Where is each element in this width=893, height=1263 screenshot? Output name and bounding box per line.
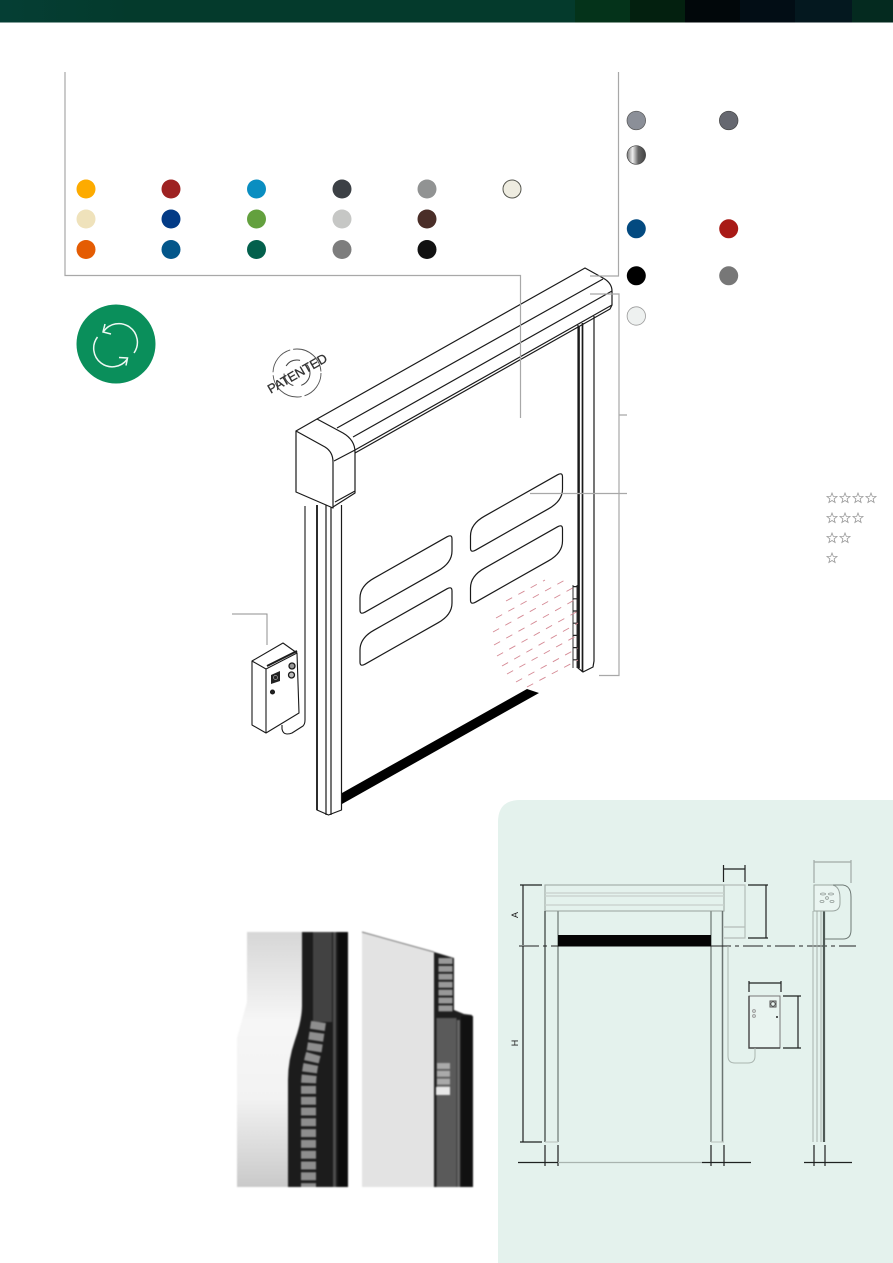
left guide: [317, 505, 342, 815]
leader: control box: [232, 614, 267, 645]
icon: control box: [252, 506, 305, 734]
leader: housing colours: [590, 72, 618, 276]
windows: [360, 474, 562, 665]
leader: curtain colours frame: [65, 72, 520, 418]
diagram: dimension lines: [518, 860, 852, 1166]
colour swatches: structure: [627, 111, 738, 325]
leader: window: [530, 492, 627, 494]
curtain black bottom edge: [342, 689, 539, 804]
motor box: [724, 885, 745, 938]
right guide: [578, 316, 594, 672]
icon: recycle arrows badge: [76, 304, 156, 384]
photo: right rail detail: [362, 932, 473, 1187]
illustration: door: [296, 268, 612, 815]
photo: left rail detail: [237, 932, 348, 1187]
diagram: bottom bar: [558, 935, 711, 946]
panel: dimensions background: [498, 800, 893, 1263]
diagram: side view: [813, 885, 851, 1142]
stamp: patented: PATENTED: [265, 350, 330, 397]
leader: guide bracket: [590, 294, 627, 676]
colour swatches: curtain: [76, 180, 521, 259]
light curtain beams: [493, 580, 578, 687]
rating stars: [827, 493, 876, 562]
diagram: front view door: [545, 885, 745, 1142]
diagram: centre line: [519, 945, 856, 947]
sensor ladder: [573, 585, 577, 668]
top banner: [0, 0, 893, 22]
diagram: control box elevation: [728, 946, 780, 1063]
end cap: [317, 419, 355, 507]
dimension label: H: H: [510, 1040, 520, 1046]
dimension label: A: A: [510, 912, 520, 918]
housing: [296, 268, 612, 450]
